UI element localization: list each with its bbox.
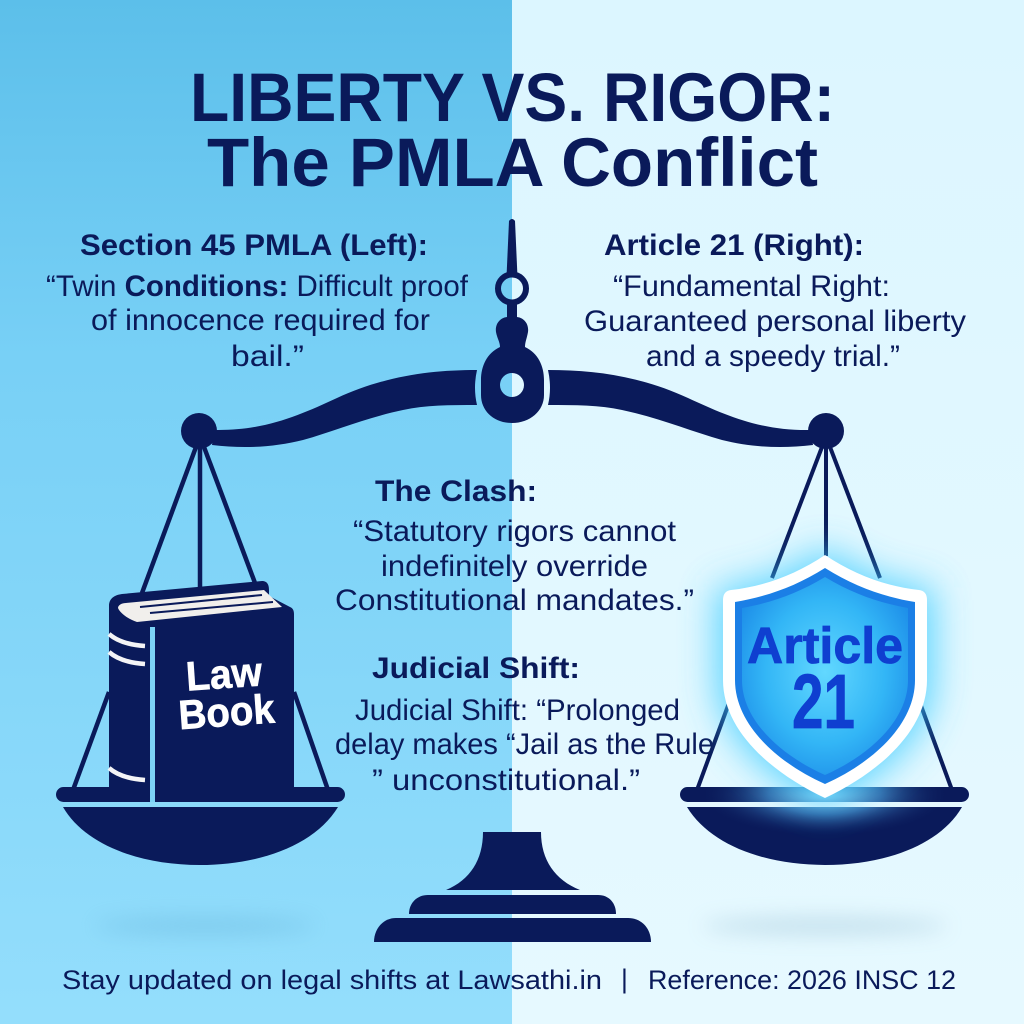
post spike xyxy=(506,219,518,277)
shield face xyxy=(742,577,908,775)
shield blue rim xyxy=(735,568,915,784)
title: The PMLA Conflict xyxy=(207,124,818,201)
text block: judicial shift quote: Judicial Shift: “Prolonged xyxy=(355,694,680,727)
text block: fundamental right: and a speedy trial.” xyxy=(646,340,900,373)
heading: Article 21: Article 21 (Right): xyxy=(604,229,864,262)
shield white border xyxy=(723,555,927,798)
text block: fundamental right: “Fundamental Right: xyxy=(613,270,890,303)
background: right panel xyxy=(512,0,1024,1024)
text block: judicial shift quote xyxy=(335,694,714,797)
text block: twin conditions: bail.” xyxy=(231,340,304,373)
text block: clash quote: Constitutional mandates.” xyxy=(335,584,694,617)
right pan with Article 21 shield xyxy=(680,447,969,865)
book pages xyxy=(118,590,282,622)
panel: Section 45 PMLA text xyxy=(46,229,469,373)
post ring xyxy=(498,274,526,302)
heading: Judicial Shift: Judicial Shift: xyxy=(372,652,580,685)
spine bands xyxy=(109,634,145,780)
panel: The Clash text xyxy=(335,475,694,617)
left knob xyxy=(181,413,217,449)
background: left panel xyxy=(0,0,512,1024)
panel: Article 21 text xyxy=(584,229,966,373)
book label: Book xyxy=(177,686,276,738)
text block: clash quote xyxy=(335,515,694,617)
footer: Reference: 2026 INSC 12 xyxy=(648,965,956,995)
icon: Article 21 shield: 21 xyxy=(792,659,855,745)
shadow under right pan xyxy=(703,917,947,935)
icon: shield glow xyxy=(716,548,934,806)
shield label: Article xyxy=(747,617,903,674)
text block: fundamental right xyxy=(584,270,966,373)
book body xyxy=(109,581,294,802)
text block: clash quote: indefinitely override xyxy=(381,550,648,583)
glow on pan xyxy=(722,787,928,830)
panel: Judicial Shift text xyxy=(335,652,714,797)
text block: judicial shift quote: delay makes “Jail as the Rule xyxy=(335,728,714,761)
right pan strings xyxy=(697,447,952,790)
footer: Stay updated on legal shifts at Lawsathi.in xyxy=(62,965,602,995)
beam left arm xyxy=(212,370,477,447)
base of scale xyxy=(374,832,651,942)
spine separator xyxy=(150,627,155,802)
book label: Law xyxy=(184,648,263,700)
text block: clash quote: “Statutory rigors cannot xyxy=(353,515,677,548)
text block: judicial shift quote: ” unconstitutional.” xyxy=(372,764,640,797)
heading: Section 45 PMLA: Section 45 PMLA (Left): xyxy=(80,229,428,262)
left pan with law book xyxy=(56,447,345,865)
left pan bar xyxy=(56,787,345,802)
left pan bowl xyxy=(63,807,338,865)
heading: The Clash: The Clash: xyxy=(375,475,537,508)
post hub xyxy=(481,303,544,423)
footer: | xyxy=(621,964,628,994)
scale beam and centre post xyxy=(181,219,844,449)
shadow under left pan xyxy=(95,917,315,935)
text block: twin conditions xyxy=(46,270,469,373)
footer xyxy=(62,964,956,995)
right pan bowl xyxy=(687,807,962,865)
icon: Article 21 shield xyxy=(723,555,927,798)
page lines xyxy=(140,595,273,613)
text block: fundamental right: Guaranteed personal liberty xyxy=(584,305,966,338)
beam right arm xyxy=(548,370,813,447)
icon: law book xyxy=(109,581,294,802)
text block: twin conditions: “Twin Conditions: Difficult proof xyxy=(46,270,469,303)
right knob xyxy=(808,413,844,449)
left pan strings xyxy=(73,447,328,790)
title: LIBERTY VS. RIGOR: xyxy=(190,59,835,136)
right pan bar xyxy=(680,787,969,802)
text block: twin conditions: of innocence required for xyxy=(91,304,430,337)
book label xyxy=(174,648,276,738)
title xyxy=(190,59,835,201)
